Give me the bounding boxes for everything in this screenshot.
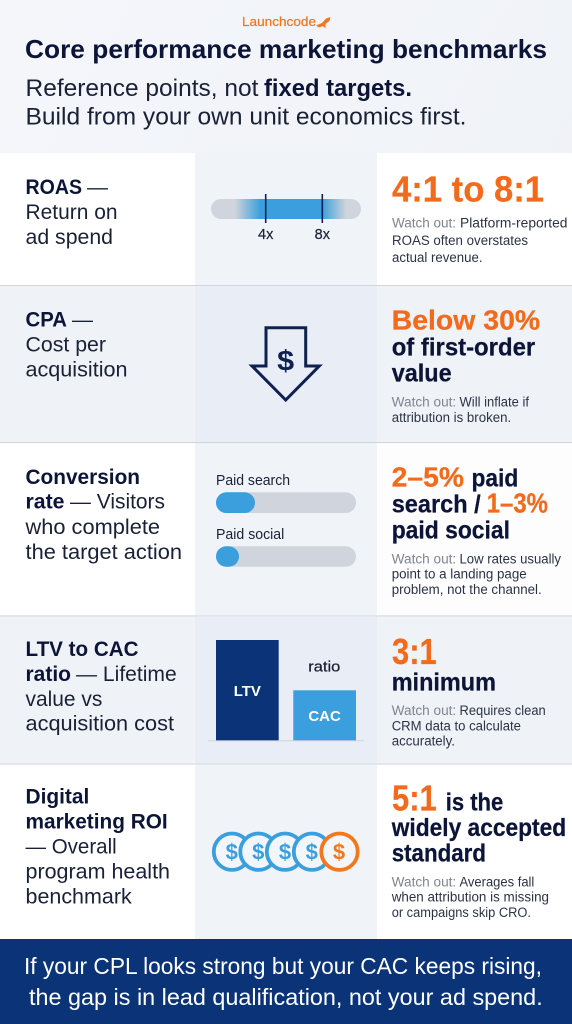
- metric name: LTV to CAC ratio: LTV to CAC: [26, 637, 138, 661]
- benchmark value: 2-5% paid search / 1-3% paid social: paid social: [392, 516, 510, 544]
- watch out note: Platform-reported: [460, 216, 568, 231]
- header: [25, 14, 547, 131]
- metric name: conversion rate: rate: [26, 490, 65, 514]
- range bar chart: 4x to 8x: 4x: [258, 227, 274, 243]
- progress bar: paid search: [216, 473, 356, 513]
- watch out note: or campaigns skip CRO.: [392, 905, 531, 920]
- watch out note: Watch out:: [392, 703, 456, 718]
- panel: conversion rate row: [0, 443, 572, 615]
- watch out note: [392, 703, 546, 749]
- panel: digital marketing ROI row: [0, 765, 572, 939]
- watch out note: Watch out:: [392, 551, 456, 566]
- watch out note: ROAS often overstates: [392, 233, 528, 248]
- subtitle: [26, 75, 466, 131]
- icon: five coins: $: [333, 840, 345, 864]
- benchmark value: 2-5% paid search / 1-3% paid social: [392, 462, 548, 544]
- metric name: LTV to CAC ratio: acquisition cost: [26, 712, 174, 736]
- footer callout: the gap is in lead qualification, not your ad spend.: [29, 984, 543, 1010]
- metric name: digital marketing ROI: benchmark: [26, 884, 132, 908]
- benchmark value: below 30%: of first-order: [392, 334, 535, 362]
- metric name: LTV to CAC ratio: — Lifetime: [76, 662, 177, 686]
- benchmark value: 3:1 minimum: 3:1: [392, 631, 437, 672]
- range bar chart: 4x to 8x: [211, 194, 361, 243]
- watch out note: Averages fall: [460, 875, 534, 890]
- watch out note: [392, 216, 568, 265]
- metric name: digital marketing ROI: Digital: [26, 784, 89, 808]
- metric name: digital marketing ROI: — Overall: [26, 834, 117, 858]
- metric name: CPA: CPA: [26, 308, 67, 332]
- icon: five coins: $: [306, 840, 318, 864]
- benchmark value: 2-5% paid search / 1-3% paid social: 2–5%: [392, 462, 464, 493]
- watch out note: Low rates usually: [460, 551, 561, 566]
- watch out note: Will inflate if: [460, 395, 529, 410]
- metric name: LTV to CAC ratio: value vs: [26, 687, 102, 711]
- benchmark value: 5:1 is the widely accepted standard: 5:1: [392, 778, 437, 819]
- watch out note: [392, 395, 529, 425]
- metric name: conversion rate: who complete: [24, 515, 160, 539]
- panel: CPA row: [0, 286, 572, 442]
- watch out note: when attribution is missing: [391, 890, 549, 905]
- progress bar: paid social: Paid social: [216, 527, 284, 543]
- benchmark value: 5:1 is the widely accepted standard: [391, 778, 566, 868]
- benchmark value: 2-5% paid search / 1-3% paid social: 1–3%: [487, 488, 548, 519]
- watch out note: Requires clean: [460, 703, 546, 718]
- watch out note: attribution is broken.: [392, 410, 511, 425]
- bar chart: LTV vs CAC: ratio: [308, 659, 340, 676]
- icon: five coins: [214, 834, 358, 870]
- watch out note: Watch out:: [392, 395, 456, 410]
- progress bar: paid search: Paid search: [216, 473, 290, 489]
- watch out note: accurately.: [392, 734, 455, 749]
- icon: down arrow with dollar sign: [252, 328, 319, 400]
- bar chart: LTV vs CAC: LTV: [234, 683, 261, 700]
- watch out note: Watch out:: [392, 216, 456, 231]
- metric name: digital marketing ROI: [26, 784, 170, 908]
- watch out note: actual revenue.: [392, 250, 482, 265]
- benchmark value: 3:1 minimum: minimum: [392, 669, 496, 697]
- metric name: ROAS: —: [87, 175, 108, 199]
- metric name: CPA: Cost per: [26, 333, 106, 357]
- metric name: digital marketing ROI: marketing ROI: [26, 809, 168, 833]
- metric name: conversion rate: Conversion: [26, 465, 140, 489]
- metric name: digital marketing ROI: program health: [26, 859, 170, 883]
- bar chart: LTV vs CAC: [208, 640, 364, 741]
- metric name: conversion rate: — Visitors: [70, 490, 165, 514]
- benchmark value: 2-5% paid search / 1-3% paid social: search /: [392, 491, 481, 519]
- metric name: ROAS: Return on: [26, 200, 118, 224]
- bar chart: LTV vs CAC: CAC: [308, 708, 341, 725]
- panel: ROAS row: [0, 153, 572, 285]
- watch out note: Watch out:: [392, 875, 456, 890]
- benchmark value: 3:1 minimum: [392, 631, 496, 697]
- watch out note: [392, 551, 561, 597]
- benchmark value: 5:1 is the widely accepted standard: standard: [392, 840, 486, 868]
- icon: five coins: $: [279, 840, 291, 864]
- progress bar: paid social: [216, 527, 356, 567]
- footer callout: If your CPL looks strong but your CAC keeps rising,: [24, 953, 542, 979]
- panel: LTV to CAC row: [0, 617, 572, 764]
- metric name: ROAS: [26, 175, 118, 249]
- benchmark value: 2-5% paid search / 1-3% paid social: paid: [472, 465, 518, 493]
- footer callout: [0, 939, 572, 1024]
- metric name: LTV to CAC ratio: ratio: [26, 662, 71, 686]
- metric name: conversion rate: the target action: [26, 540, 182, 564]
- metric name: conversion rate: [24, 465, 182, 564]
- logo: Launchcode: Launchcode: [242, 14, 316, 29]
- subtitle: fixed targets.: [264, 75, 412, 102]
- benchmark value: 5:1 is the widely accepted standard: is the: [446, 789, 503, 817]
- metric name: CPA: acquisition: [26, 358, 128, 382]
- title: Core performance marketing benchmarks: [25, 34, 547, 64]
- watch out note: problem, not the channel.: [392, 582, 542, 597]
- watch out note: point to a landing page: [392, 567, 527, 582]
- metric name: CPA: —: [72, 308, 93, 332]
- metric name: CPA: [26, 308, 128, 382]
- benchmark value: 4:1 to 8:1: 4:1 to 8:1: [392, 169, 544, 210]
- icon: down arrow with dollar sign: $: [277, 346, 294, 378]
- benchmark value: below 30%: [392, 304, 540, 388]
- metric name: LTV to CAC ratio: [26, 637, 177, 736]
- subtitle: Build from your own unit economics first.: [26, 104, 466, 131]
- watch out note: [391, 875, 549, 920]
- subtitle: Reference points, not: [26, 75, 259, 102]
- benchmark value: below 30%: Below 30%: [392, 304, 540, 335]
- metric name: ROAS: ad spend: [26, 225, 113, 249]
- icon: five coins: $: [252, 840, 264, 864]
- metric name: ROAS: ROAS: [26, 175, 82, 199]
- range bar chart: 4x to 8x: 8x: [315, 227, 331, 243]
- benchmark value: below 30%: value: [392, 360, 452, 388]
- watch out note: CRM data to calculate: [392, 718, 521, 733]
- icon: five coins: $: [226, 840, 238, 864]
